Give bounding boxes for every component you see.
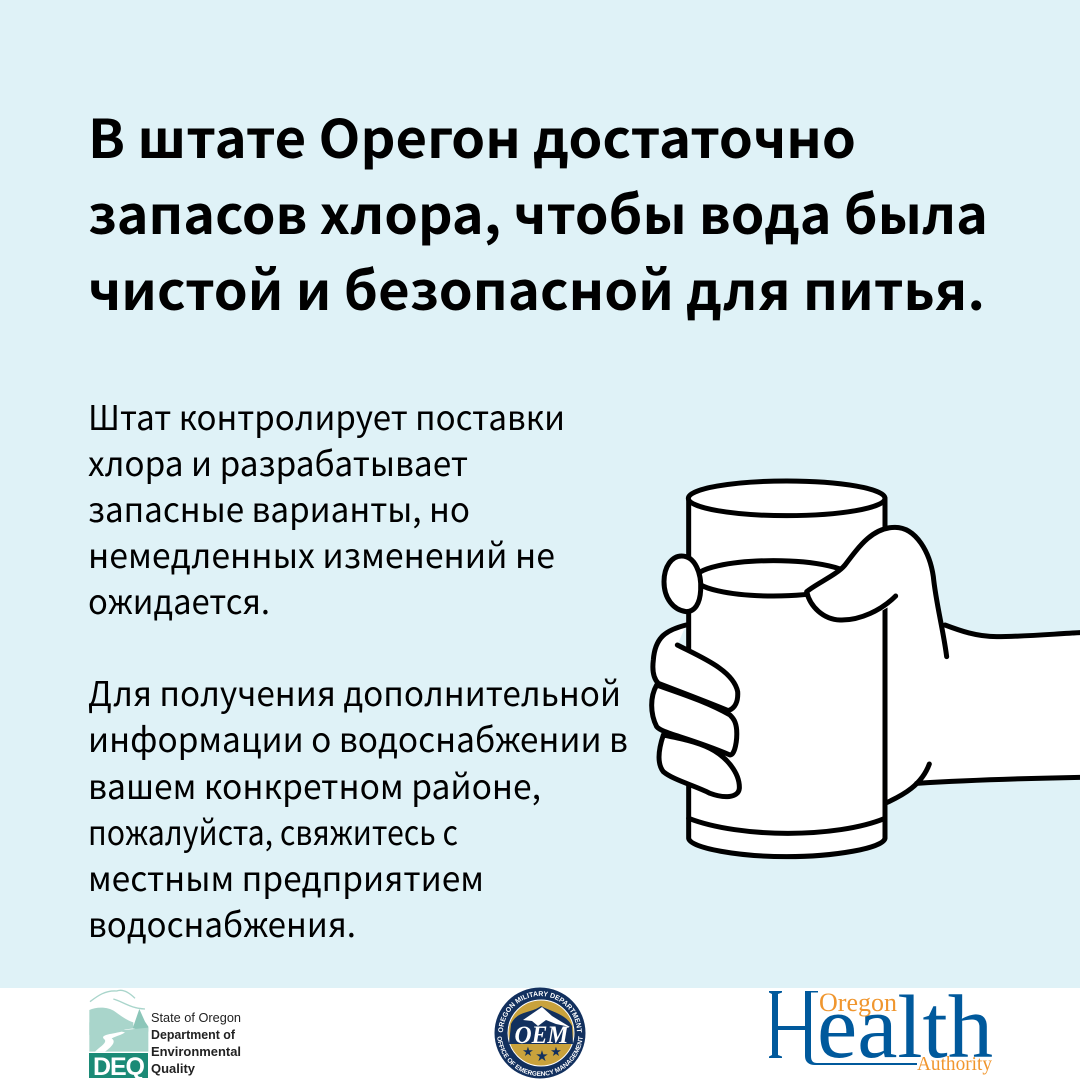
seal stars: ★ <box>535 1047 549 1065</box>
DEQ green box <box>89 1053 148 1078</box>
OHA word Authority: Authority <box>917 1053 992 1075</box>
text block: state monitoring <box>88 391 565 624</box>
glass rim <box>688 481 885 516</box>
seal OEM lettering: OEM <box>514 1022 569 1049</box>
DEQ agency name: State of Oregon <box>151 1010 241 1025</box>
text block: state monitoring: немедленных изменений не <box>88 529 555 578</box>
seal mountain <box>509 1006 573 1044</box>
title: чистой и безопасной для питья. <box>88 250 985 326</box>
logo: Oregon Office of Emergency Management seal <box>494 988 586 1078</box>
text block: contact information <box>88 667 628 947</box>
text block: contact information: водоснабжения. <box>88 898 356 947</box>
water level <box>695 561 852 596</box>
index fingertip <box>664 556 701 612</box>
title: В штате Орегон достаточно <box>88 98 856 174</box>
text block: contact information: пожалуйста, свяжитесь с <box>88 806 458 855</box>
text block: state monitoring: хлора и разрабатывает <box>88 437 468 486</box>
ring finger <box>652 685 737 755</box>
arm top edge <box>945 625 1080 637</box>
OHA word ealth: ealth <box>817 978 993 1077</box>
logo: Oregon Office of Emergency Management seal: OFFICE OF EMERGENCY MANAGEMENT <box>497 1036 583 1076</box>
thumb and hand outline <box>807 527 947 657</box>
text block: state monitoring: Штат контролирует поставки <box>88 391 565 440</box>
OHA letter H <box>769 991 917 1065</box>
DEQ landscape <box>89 990 148 1052</box>
DEQ agency name: Environmental <box>151 1044 241 1059</box>
logo: Oregon Office of Emergency Management seal: OREGON MILITARY DEPARTMENT <box>498 991 582 1032</box>
seal stars <box>522 1045 562 1065</box>
DEQ agency name: Department of <box>151 1027 236 1042</box>
seal stars: ★ <box>550 1045 562 1060</box>
logo: Oregon Health Authority <box>769 978 993 1077</box>
little finger <box>659 735 739 797</box>
arm bottom edge <box>917 777 1080 783</box>
text block: contact information: вашем конкретном районе, <box>88 760 541 809</box>
middle finger <box>653 625 738 711</box>
footer band <box>0 988 1080 1080</box>
seal stars: ★ <box>522 1045 534 1060</box>
glass base line <box>689 818 885 833</box>
text block: contact information: местным предприятием <box>88 852 484 901</box>
text block: contact information: Для получения дополнительной <box>88 667 621 716</box>
hand and arm fill <box>807 527 1080 803</box>
text block: contact information: информации о водоснабжении в <box>88 713 628 762</box>
text block: state monitoring: ожидается. <box>88 575 270 624</box>
DEQ agency name: Quality <box>151 1061 196 1076</box>
text block: state monitoring: запасные варианты, но <box>88 483 470 532</box>
logo: Oregon DEQ <box>89 990 241 1080</box>
glass body <box>689 498 885 857</box>
OHA word Oregon: Oregon <box>819 988 897 1017</box>
DEQ agency name <box>151 1010 241 1076</box>
wrist curve <box>887 764 929 803</box>
title: запасов хлора, чтобы вода была <box>88 174 988 250</box>
title <box>88 98 988 326</box>
icon: hand holding glass of water <box>652 481 1080 857</box>
